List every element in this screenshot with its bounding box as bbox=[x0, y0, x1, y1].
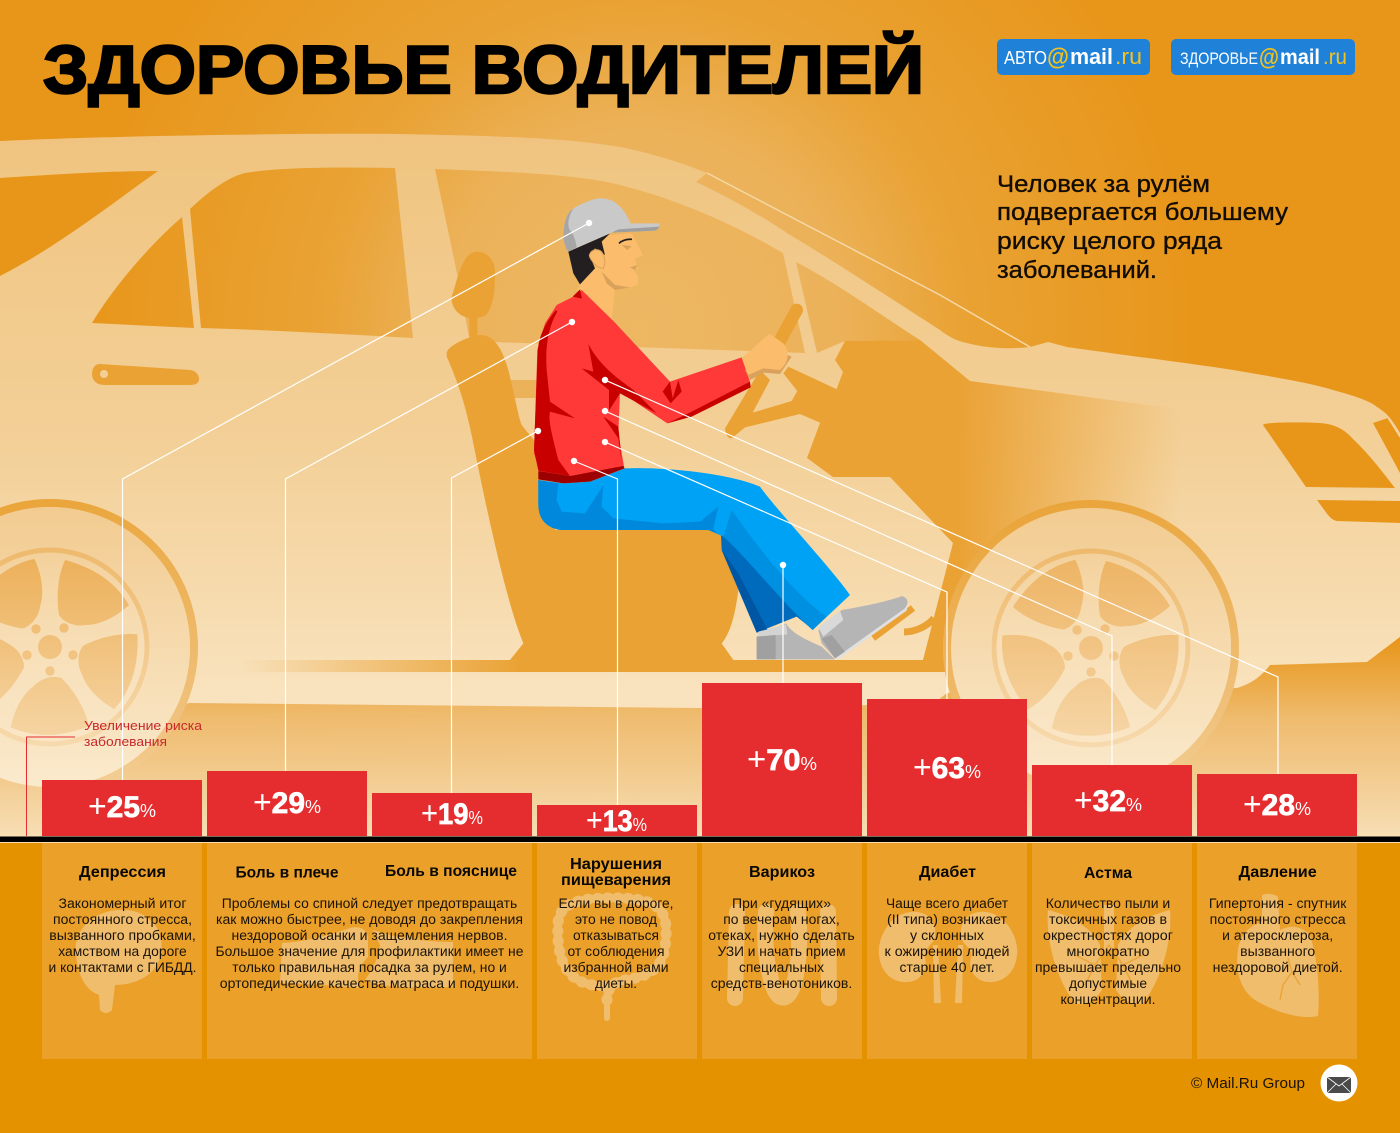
logo: zdorovie mail.ru bbox=[1171, 39, 1355, 75]
description: постоянного стресса bbox=[1210, 912, 1346, 927]
description: Большое значение для профилактики имеет не bbox=[216, 944, 524, 959]
panel: digestion bbox=[537, 843, 697, 1059]
description: как можно быстрее, не доводя до закрепления bbox=[216, 912, 523, 927]
bar +70 bbox=[702, 683, 862, 836]
description bbox=[216, 896, 524, 991]
front wheel bbox=[947, 504, 1235, 792]
heading bbox=[561, 856, 671, 889]
intro text: заболеваний. bbox=[997, 257, 1157, 284]
bar +25: +25% bbox=[88, 788, 156, 824]
description: Количество пыли и bbox=[1046, 896, 1170, 911]
door handle bbox=[92, 364, 199, 385]
spokes bbox=[0, 545, 157, 764]
bar +28 bbox=[1197, 774, 1357, 836]
neck and face bbox=[577, 233, 643, 322]
description: Проблемы со спиной следует предотвращать bbox=[222, 896, 517, 911]
intro text: риску целого ряда bbox=[997, 228, 1223, 255]
description: отеках, нужно сделать bbox=[708, 928, 855, 943]
logo: zdorovie mail.ru: .ru bbox=[1323, 46, 1347, 69]
description: от соблюдения bbox=[568, 944, 664, 959]
door lock dot bbox=[100, 370, 108, 378]
description: допустимые bbox=[1069, 976, 1147, 991]
wheel light veil bbox=[0, 547, 150, 747]
description: специальных bbox=[739, 960, 824, 975]
heading: shoulder pain: Боль в плече bbox=[236, 864, 339, 882]
legend: risk increase: Увеличение риска bbox=[84, 718, 203, 733]
description: ортопедические качества матраса и подушки. bbox=[220, 976, 519, 991]
title: ЗДОРОВЬЕ ВОДИТЕЛЕЙ bbox=[43, 31, 924, 108]
description bbox=[48, 896, 196, 975]
description: это не повод bbox=[575, 912, 657, 927]
panel: diabetes bbox=[867, 843, 1027, 1059]
rim ring bbox=[994, 551, 1188, 745]
wheel light veil bbox=[991, 548, 1191, 748]
lower orange band bbox=[0, 842, 1400, 1133]
pedal bbox=[873, 608, 934, 638]
panel: blood pressure bbox=[1197, 843, 1357, 1059]
description bbox=[558, 896, 674, 991]
description: (II типа) возникает bbox=[887, 912, 1007, 927]
description: вызванного bbox=[1240, 944, 1315, 959]
description: только правильная посадка за рулем, но и bbox=[232, 960, 507, 975]
bar +32: +32% bbox=[1074, 782, 1142, 818]
bar +19 bbox=[372, 793, 532, 836]
description: вызванного пробками, bbox=[49, 928, 196, 943]
spokes bbox=[976, 546, 1198, 765]
back leg bbox=[721, 535, 813, 633]
legend: risk increase bbox=[26, 718, 203, 836]
description: по вечерам ногах, bbox=[723, 912, 840, 927]
description: нездоровой осанки и защемления нервов. bbox=[232, 928, 508, 943]
leader lines bbox=[122, 223, 1278, 805]
description: диеты. bbox=[595, 976, 637, 991]
hub bbox=[1063, 624, 1119, 677]
icon: mail envelope bbox=[1320, 1064, 1358, 1102]
icon: intestines bbox=[558, 898, 666, 1018]
icon: lungs bbox=[1048, 905, 1170, 1004]
bar +29: +29% bbox=[253, 784, 321, 820]
logo: zdorovie mail.ru: ЗДОРОВЬЕ bbox=[1180, 49, 1258, 68]
description: нездоровой диетой. bbox=[1213, 960, 1343, 975]
description: избранной вами bbox=[564, 960, 668, 975]
background lower gradient bbox=[0, 640, 1400, 838]
logo: avto mail.ru: mail bbox=[1070, 44, 1113, 69]
bar +28: +28% bbox=[1243, 786, 1311, 822]
jeans bbox=[538, 468, 850, 630]
description: и атеросклероза, bbox=[1222, 928, 1333, 943]
hair bbox=[568, 233, 610, 284]
ear bbox=[589, 250, 605, 268]
heading: Давление bbox=[1239, 864, 1317, 881]
floor band bbox=[240, 660, 947, 672]
legend: risk increase: заболевания bbox=[84, 734, 167, 749]
car body bbox=[0, 134, 1400, 760]
back shoe bbox=[757, 623, 835, 659]
description: Закономерный итог bbox=[58, 896, 187, 911]
steering wheel bbox=[725, 310, 838, 438]
description: к ожирению людей bbox=[884, 944, 1010, 959]
description: превышает предельно bbox=[1035, 960, 1181, 975]
copyright: © Mail.Ru Group bbox=[1191, 1076, 1305, 1092]
bar +63: +63% bbox=[913, 749, 981, 785]
heading: Диабет bbox=[919, 864, 976, 881]
intro text: Человек за рулём bbox=[997, 171, 1210, 198]
logo: avto mail.ru: .ru bbox=[1115, 44, 1142, 69]
rim ring bbox=[0, 550, 147, 744]
description: УЗИ и начать прием bbox=[718, 944, 846, 959]
description: постоянного стресса, bbox=[53, 912, 192, 927]
leader dots bbox=[535, 220, 786, 568]
bar +13 bbox=[537, 802, 697, 838]
bar +29 bbox=[207, 771, 367, 836]
bar chart bbox=[42, 683, 1357, 838]
background bbox=[0, 0, 1400, 840]
description: Чаще всего диабет bbox=[886, 896, 1008, 911]
description: При «гудящих» bbox=[732, 896, 831, 911]
cream rule bbox=[0, 842, 1400, 843]
description bbox=[1209, 896, 1347, 975]
logo: avto mail.ru: @ bbox=[1047, 44, 1069, 71]
rear band behind seat bbox=[510, 380, 538, 398]
wheel arch ring bbox=[947, 504, 1235, 792]
description: окрестностях дорог bbox=[1043, 928, 1173, 943]
description bbox=[1035, 896, 1181, 1007]
logo: avto mail.ru bbox=[997, 39, 1150, 75]
icon: spine and shoulders bbox=[280, 927, 453, 988]
description: и контактами с ГИБДД. bbox=[48, 960, 196, 975]
icon: kidneys bbox=[879, 912, 1017, 1003]
description: токсичных газов в bbox=[1049, 912, 1167, 927]
intro text: подвергается большему bbox=[997, 199, 1288, 226]
icon: brain bbox=[76, 910, 162, 1013]
dashboard block bbox=[807, 340, 1200, 672]
rear wheel bbox=[0, 503, 194, 791]
car silhouette bbox=[0, 134, 1400, 760]
logo: zdorovie mail.ru: mail bbox=[1280, 46, 1320, 69]
description bbox=[884, 896, 1010, 975]
bar +32 bbox=[1032, 765, 1192, 836]
bar +19: +19% bbox=[421, 795, 483, 831]
description: хамством на дороге bbox=[58, 944, 187, 959]
logo: zdorovie mail.ru: @ bbox=[1259, 44, 1279, 70]
heading: Варикоз bbox=[749, 864, 815, 881]
bar +70: +70% bbox=[747, 741, 817, 777]
logo: avto mail.ru: АВТО bbox=[1004, 48, 1047, 68]
heading: Астма bbox=[1084, 865, 1132, 882]
description: у склонных bbox=[910, 928, 984, 943]
icon: heart bbox=[1237, 894, 1319, 1017]
tire bbox=[951, 508, 1231, 788]
description: многократно bbox=[1066, 944, 1150, 959]
description: Гипертония - спутник bbox=[1209, 896, 1347, 911]
heading: lower back pain: Боль в пояснице bbox=[385, 863, 517, 880]
panel: asthma bbox=[1032, 843, 1192, 1059]
baseline rule bbox=[0, 836, 1400, 842]
description: старше 40 лет. bbox=[900, 960, 994, 975]
description: концентрации. bbox=[1060, 992, 1156, 1007]
wheel arch ring bbox=[0, 503, 194, 791]
hand bbox=[742, 334, 792, 380]
bar +63 bbox=[867, 699, 1027, 836]
description: Если вы в дороге, bbox=[558, 896, 674, 911]
red sweater bbox=[534, 289, 751, 483]
description bbox=[708, 896, 855, 991]
panel: varicose bbox=[702, 843, 862, 1059]
heading: Депрессия bbox=[79, 864, 166, 881]
description: отказываться bbox=[573, 928, 659, 943]
tire bbox=[0, 507, 190, 787]
driver illustration with seat bbox=[447, 198, 908, 660]
bar +13: +13% bbox=[586, 802, 647, 838]
panel: shoulder and lower back pain bbox=[207, 843, 532, 1059]
headlight edge bbox=[1388, 418, 1400, 437]
icon: legs bbox=[735, 912, 829, 998]
bar +25 bbox=[42, 780, 202, 836]
cap bbox=[563, 198, 659, 252]
heading: пищеварения bbox=[561, 872, 671, 889]
intro text bbox=[997, 171, 1288, 284]
hub bbox=[22, 623, 78, 676]
seat bbox=[447, 252, 738, 660]
windshield thin line bbox=[707, 173, 1030, 347]
panel: depression bbox=[42, 843, 202, 1059]
front shoe bbox=[818, 596, 908, 659]
description: средств-венотоников. bbox=[711, 976, 852, 991]
heading: Нарушения bbox=[570, 856, 662, 873]
